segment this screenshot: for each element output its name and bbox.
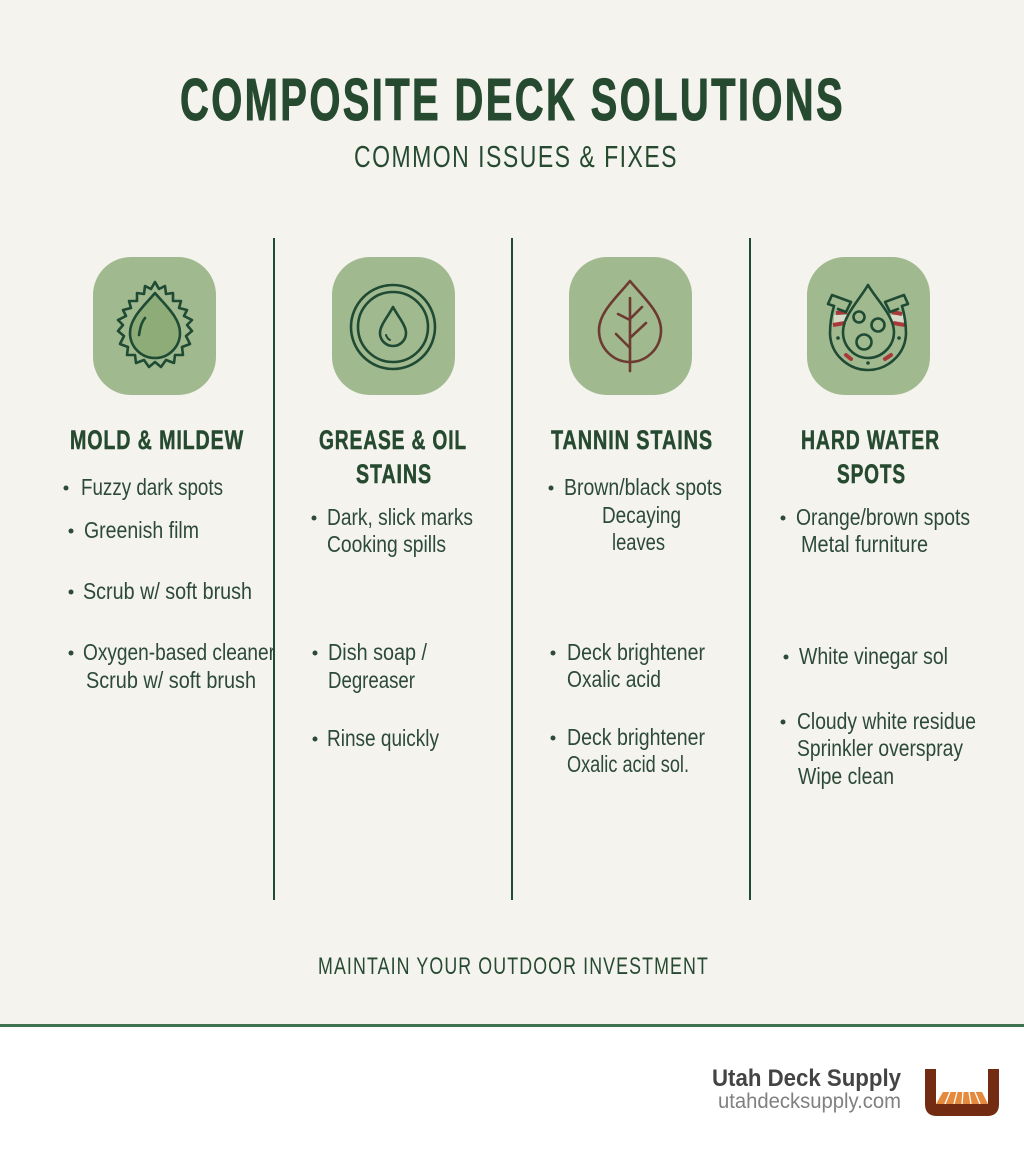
- list: grease and oil stains: [312, 504, 473, 751]
- list: hard water spots: Metal furniture: [801, 531, 928, 557]
- icon: mold drop: [93, 257, 216, 395]
- list: mold and mildew: Scrub w/ soft brush: [86, 667, 256, 693]
- list: mold and mildew: Scrub w/ soft brush: [83, 578, 252, 604]
- list: mold and mildew: [64, 474, 275, 693]
- brand name: Utah Deck Supply: [712, 1065, 902, 1092]
- heading: grease and oil stains: STAINS: [356, 459, 432, 489]
- icon: horseshoe with drop: [807, 257, 930, 395]
- heading: hard water spots: SPOTS: [837, 459, 906, 489]
- list: grease and oil stains: Dark, slick marks: [327, 504, 473, 530]
- list: tannin stains: leaves: [612, 529, 665, 555]
- list: hard water spots: White vinegar sol: [799, 643, 948, 669]
- icon: logo: [925, 1069, 999, 1116]
- icon: oil drop in circle: [332, 257, 455, 395]
- panel: mold and mildew: [64, 257, 275, 693]
- icon: leaf: [569, 257, 692, 395]
- list: grease and oil stains: Dish soap /: [328, 639, 428, 665]
- tagline: MAINTAIN YOUR OUTDOOR INVESTMENT: [318, 953, 709, 980]
- heading: hard water spots: HARD WATER: [801, 425, 940, 455]
- list: mold and mildew: Greenish film: [84, 517, 199, 543]
- panel: grease and oil stains: [312, 257, 473, 751]
- list: hard water spots: [780, 504, 976, 789]
- list: tannin stains: Deck brightener: [567, 724, 705, 750]
- heading: mold and mildew: MOLD & MILDEW: [70, 425, 244, 455]
- list: grease and oil stains: Rinse quickly: [327, 725, 439, 751]
- list: tannin stains: Oxalic acid sol.: [567, 751, 689, 777]
- list: tannin stains: Brown/black spots: [564, 474, 722, 500]
- list: grease and oil stains: Degreaser: [328, 667, 415, 693]
- subtitle: COMMON ISSUES & FIXES: [354, 139, 678, 174]
- list: tannin stains: Decaying: [602, 502, 681, 528]
- heading: grease and oil stains: GREASE & OIL: [319, 425, 467, 455]
- heading: grease and oil stains: [319, 425, 467, 489]
- list: tannin stains: Oxalic acid: [567, 666, 661, 692]
- heading: hard water spots: [801, 425, 940, 489]
- list: hard water spots: Cloudy white residue: [797, 708, 976, 734]
- panel: tannin stains: [548, 257, 722, 777]
- list: hard water spots: Sprinkler overspray: [797, 735, 963, 761]
- list: mold and mildew: Fuzzy dark spots: [81, 474, 223, 500]
- list: hard water spots: Orange/brown spots: [796, 504, 970, 530]
- list: tannin stains: [548, 474, 722, 777]
- panel: hard water spots: [780, 257, 976, 789]
- list: grease and oil stains: Cooking spills: [327, 531, 446, 557]
- list: hard water spots: Wipe clean: [798, 763, 894, 789]
- list: mold and mildew: Oxygen-based cleaner: [83, 639, 275, 665]
- heading: tannin stains: TANNIN STAINS: [551, 425, 713, 455]
- brand url: utahdecksupply.com: [718, 1090, 901, 1113]
- list: tannin stains: Deck brightener: [567, 639, 705, 665]
